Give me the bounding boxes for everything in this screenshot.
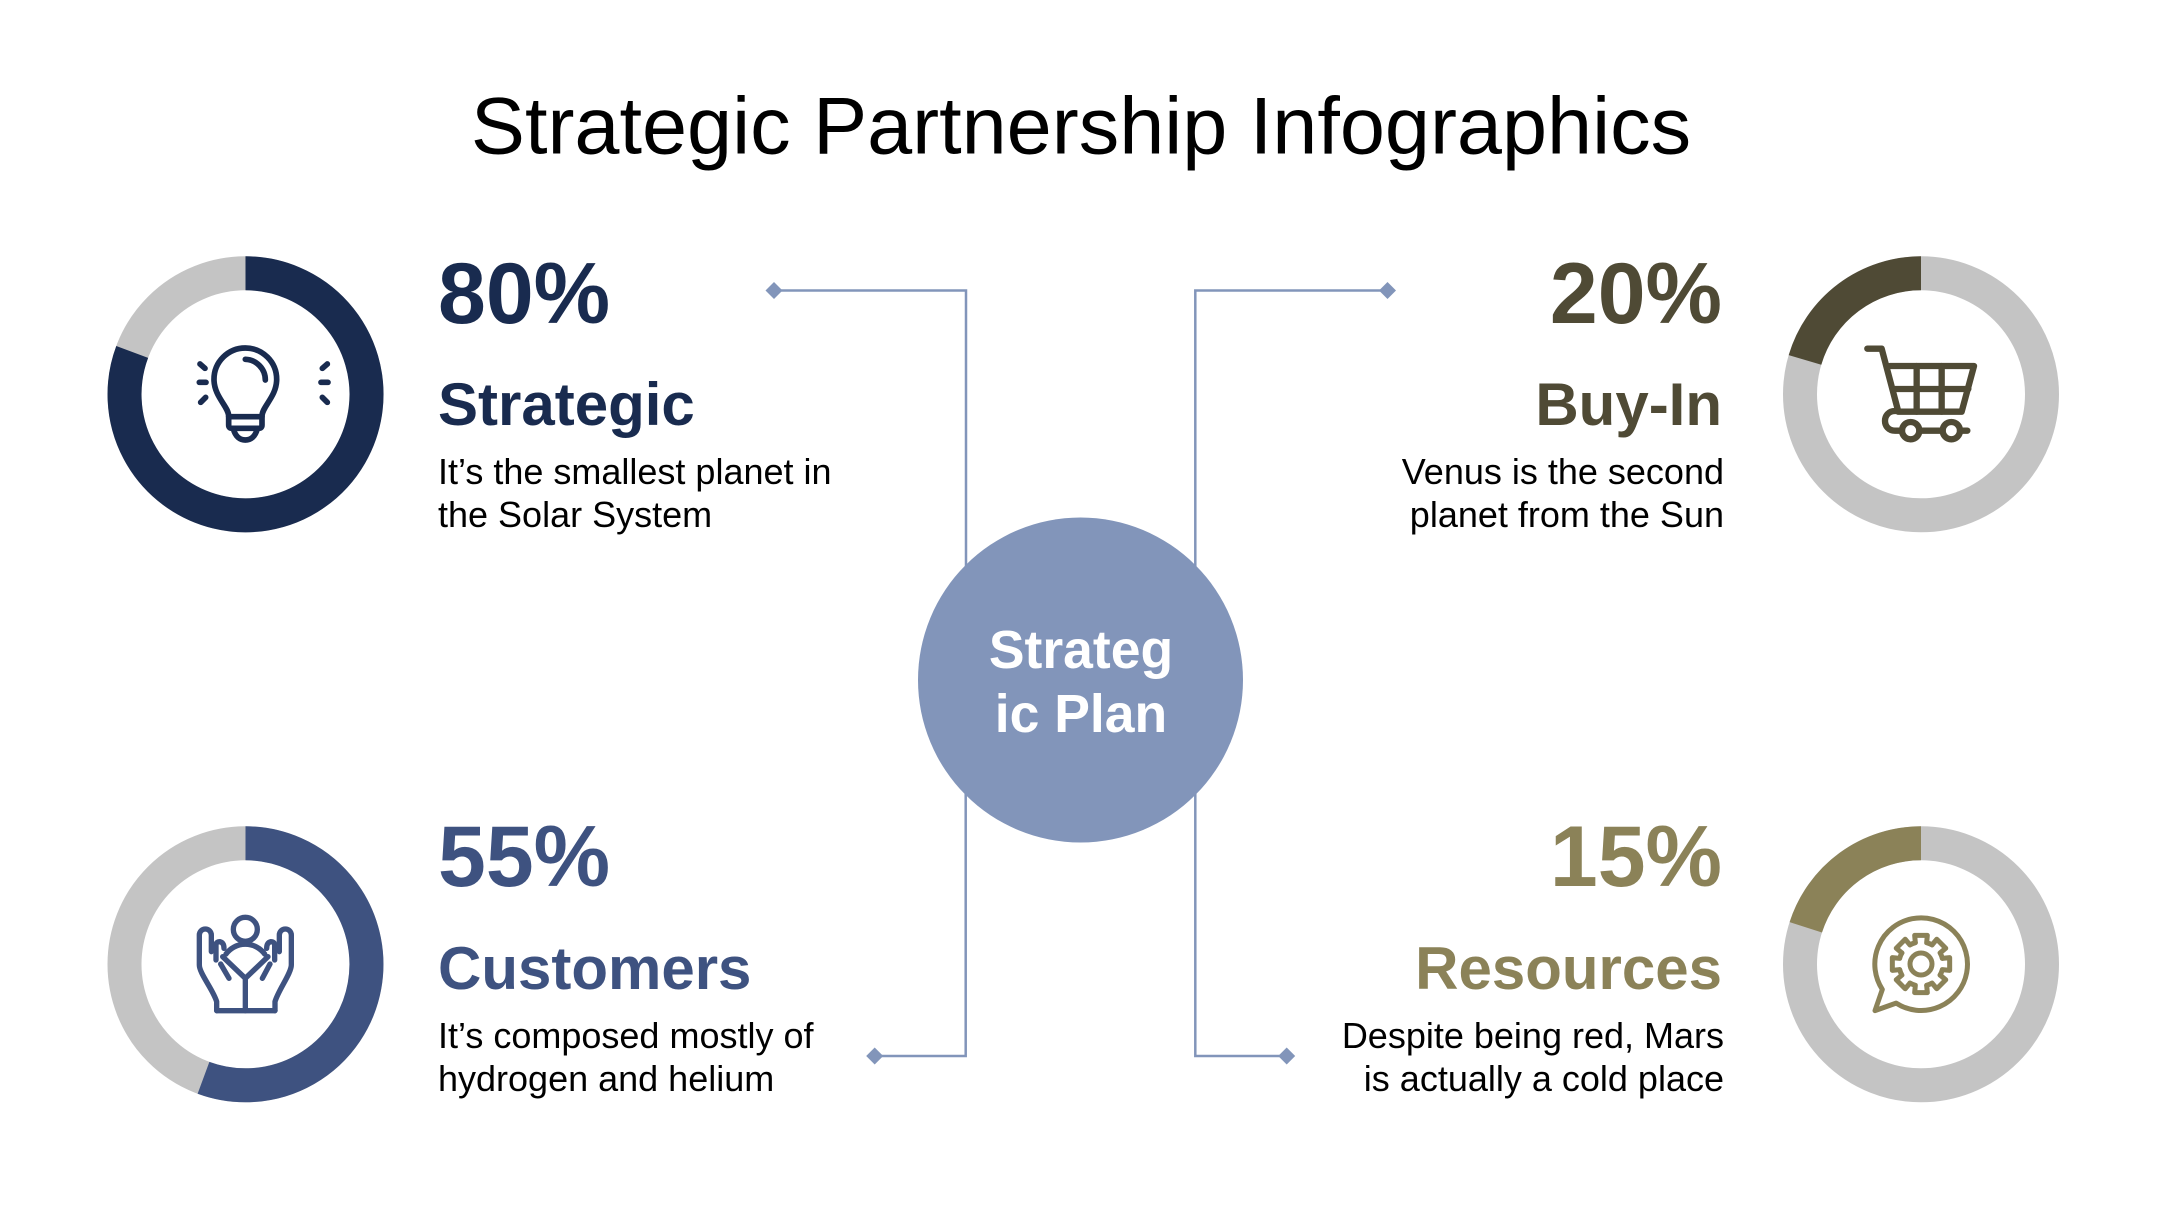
panel: Customers 55% xyxy=(124,809,814,1099)
center circle: Strategic Plan: ic Plan xyxy=(995,685,1167,744)
icon: speech bubble with gear xyxy=(1875,918,1967,1011)
icon: hands holding person xyxy=(199,917,291,1011)
description xyxy=(1342,1015,1724,1099)
center circle: Strategic Plan: Strateg xyxy=(989,621,1173,680)
description xyxy=(438,1015,814,1099)
icon: light bulb xyxy=(199,348,328,440)
connector: bottom left xyxy=(866,760,966,1064)
description: It’s the smallest planet in xyxy=(438,451,832,492)
panel: Resources 15% xyxy=(1342,809,2042,1099)
donut chart: 55% xyxy=(124,843,366,1085)
description: Venus is the second xyxy=(1402,451,1724,492)
panel: Strategic 80% xyxy=(124,246,832,535)
heading: Customers xyxy=(438,935,751,1002)
donut chart: 80% xyxy=(124,273,367,515)
donut chart: 20% xyxy=(1800,273,2042,515)
percentage: 15% xyxy=(1550,809,1722,905)
heading: Strategic xyxy=(438,371,695,438)
description: the Solar System xyxy=(438,494,712,535)
heading: Buy-In xyxy=(1535,371,1722,438)
connector: bottom right xyxy=(1195,760,1295,1064)
description: Despite being red, Mars xyxy=(1342,1015,1724,1056)
description: hydrogen and helium xyxy=(438,1058,774,1099)
description: is actually a cold place xyxy=(1364,1058,1724,1099)
connector: top left xyxy=(766,282,966,600)
title: Strategic Partnership Infographics xyxy=(471,82,1691,172)
heading: Resources xyxy=(1415,935,1722,1002)
description xyxy=(1402,451,1724,535)
panel: Buy-In 20% xyxy=(1402,246,2042,535)
icon: shopping cart xyxy=(1867,349,1974,439)
description xyxy=(438,451,832,535)
description: It’s composed mostly of xyxy=(438,1015,814,1056)
percentage: 80% xyxy=(438,246,610,342)
percentage: 55% xyxy=(438,809,610,905)
percentage: 20% xyxy=(1550,246,1722,342)
center circle: Strategic Plan xyxy=(918,518,1243,842)
connector: top right xyxy=(1195,282,1396,600)
donut chart: 15% xyxy=(1800,843,2042,1085)
description: planet from the Sun xyxy=(1410,494,1724,535)
